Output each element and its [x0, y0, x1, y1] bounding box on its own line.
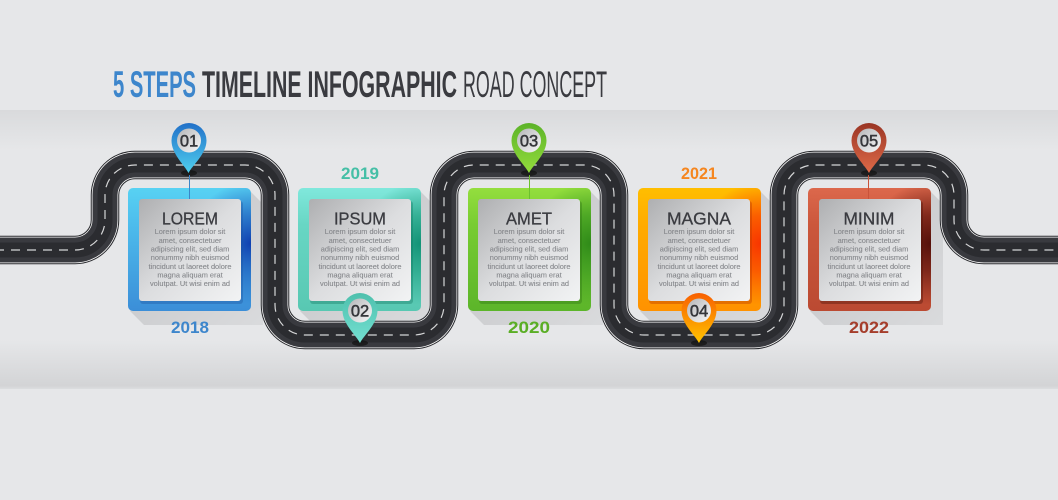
heading: MINIM: [844, 208, 894, 228]
text block: adipiscing elit, sed diam: [830, 244, 908, 254]
title: 5 STEPS: [113, 64, 196, 105]
background band: [0, 110, 1058, 389]
text block: volutpat. Ut wisi enim ad: [320, 279, 400, 288]
year 2020: 2020: [508, 319, 550, 337]
pin 04: [682, 293, 716, 346]
text block: Lorem ipsum dolor sit: [834, 227, 904, 236]
text block: nonummy nibh euismod: [830, 253, 908, 262]
text block: tincidunt ut laoreet dolore: [828, 262, 910, 271]
text block: nonummy nibh euismod: [321, 253, 399, 262]
text block: nonummy nibh euismod: [660, 253, 738, 262]
text block: magna aliquam erat: [496, 270, 562, 280]
text block: Lorem ipsum dolor sit: [664, 227, 734, 236]
text block: magna aliquam erat: [666, 270, 732, 280]
year 2021: 2021: [681, 165, 717, 183]
panel: step 5 MINIM: [808, 188, 931, 311]
text block: tincidunt ut laoreet dolore: [148, 262, 232, 271]
text block: adipiscing elit, sed diam: [151, 244, 229, 254]
text block: volutpat. Ut wisi enim ad: [659, 279, 739, 288]
text block: magna aliquam erat: [836, 270, 902, 280]
text block: nonummy nibh euismod: [151, 253, 229, 262]
text block: nonummy nibh euismod: [490, 253, 568, 262]
text block: tincidunt ut laoreet dolore: [318, 262, 402, 271]
text block: [318, 227, 402, 288]
text block: [658, 227, 740, 288]
text block: [488, 227, 570, 288]
text block: amet, consectetuer: [329, 236, 392, 245]
text block: volutpat. Ut wisi enim ad: [150, 279, 230, 288]
text block: adipiscing elit, sed diam: [321, 244, 399, 254]
pin 01: 01: [180, 132, 198, 150]
heading: MAGNA: [667, 208, 731, 228]
text block: adipiscing elit, sed diam: [660, 244, 738, 254]
text block: amet, consectetuer: [838, 236, 901, 245]
pin 02: [342, 293, 378, 346]
year 2018: 2018: [171, 319, 209, 337]
text block: volutpat. Ut wisi enim ad: [829, 279, 909, 288]
title: TIMELINE INFOGRAPHIC: [202, 64, 457, 105]
pin 04: 04: [690, 302, 708, 320]
heading: LOREM: [162, 208, 218, 228]
pin 01: [172, 123, 206, 199]
text block: amet, consectetuer: [668, 236, 731, 245]
pin 03: 03: [520, 132, 538, 150]
heading: IPSUM: [334, 208, 386, 228]
year 2022: 2022: [849, 319, 889, 337]
text block: Lorem ipsum dolor sit: [494, 227, 564, 236]
text block: amet, consectetuer: [498, 236, 561, 245]
year 2019: 2019: [341, 165, 379, 183]
text: ROAD CONCEPT: [463, 64, 607, 105]
panel: step 2 IPSUM: [298, 188, 421, 311]
text block: magna aliquam erat: [327, 270, 393, 280]
text block: [828, 227, 910, 288]
text block: [148, 227, 232, 288]
text block: tincidunt ut laoreet dolore: [488, 262, 570, 271]
text block: adipiscing elit, sed diam: [490, 244, 568, 254]
pin 05: [852, 123, 886, 199]
text block: magna aliquam erat: [157, 270, 223, 280]
winding road: [0, 165, 1058, 335]
pin 02: 02: [351, 302, 369, 320]
text block: tincidunt ut laoreet dolore: [658, 262, 740, 271]
pin 05: 05: [860, 132, 878, 150]
pin 03: [512, 123, 546, 199]
heading: AMET: [506, 208, 552, 228]
text block: amet, consectetuer: [159, 236, 222, 245]
text block: Lorem ipsum dolor sit: [325, 227, 395, 236]
text block: volutpat. Ut wisi enim ad: [489, 279, 569, 288]
panel: step 4 MAGNA: [638, 188, 761, 311]
text block: Lorem ipsum dolor sit: [155, 227, 225, 236]
panel: step 1 LOREM: [128, 188, 251, 311]
panel: step 3 AMET: [468, 188, 591, 311]
card shadows: [130, 192, 943, 325]
